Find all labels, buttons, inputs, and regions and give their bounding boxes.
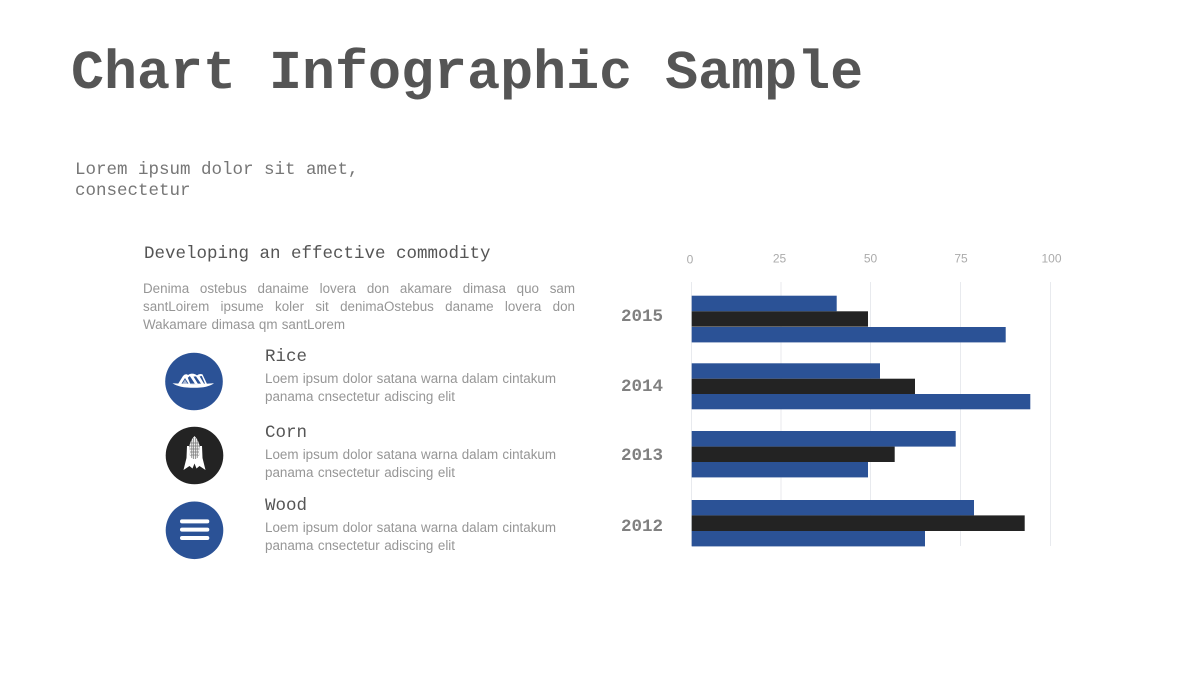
bars: 2015 (692, 296, 1006, 342)
icon: corn (166, 426, 224, 484)
year label 2013: 2013 (621, 446, 663, 466)
bars: 2013 (692, 431, 956, 477)
axis labels: 50 (864, 252, 877, 266)
text: wood description: Loem ipsum dolor satana warna dalam cintakum (265, 520, 556, 535)
intro paragraph (143, 281, 575, 332)
year label 2012: 2012 (621, 517, 663, 537)
text: corn description: Loem ipsum dolor satana warna dalam cintakum (265, 447, 556, 462)
label: corn: Corn (265, 423, 307, 443)
text: rice description: panama cnsectetur adiscing elit (265, 389, 455, 404)
axis labels: 25 (773, 252, 786, 266)
year label 2015: 2015 (621, 307, 663, 327)
icon: wood (166, 502, 224, 560)
text: corn description (265, 447, 556, 480)
axis labels: 0 (687, 252, 694, 266)
text: wood description: panama cnsectetur adiscing elit (265, 538, 455, 553)
axis labels (687, 252, 1062, 266)
intro paragraph: Wakamare dimasa qm santLorem (143, 317, 345, 332)
bar chart (687, 252, 1062, 546)
text: wood description (265, 520, 556, 553)
subtitle: Lorem ipsum dolor sit amet, consectetur (75, 160, 359, 201)
axis labels: 75 (954, 252, 968, 266)
year label 2014: 2014 (621, 377, 663, 397)
text: rice description (265, 371, 556, 404)
intro paragraph: Denima ostebus danaime lovera don akamare dimasa quo sam (143, 281, 575, 296)
intro paragraph: santLoirem ipsume koler sit denimaOstebus daname lovera don (143, 299, 575, 314)
title: Chart Infographic Sample (71, 42, 863, 105)
text: rice description: Loem ipsum dolor satana warna dalam cintakum (265, 371, 556, 386)
icon: rice (165, 352, 223, 410)
bars: 2012 (692, 500, 1025, 546)
label: wood: Wood (265, 496, 307, 516)
heading: developing an effective commodity: Developing an effective commodity (144, 244, 491, 264)
text: corn description: panama cnsectetur adiscing elit (265, 465, 455, 480)
bars: 2014 (692, 363, 1030, 409)
axis labels: 100 (1041, 252, 1062, 266)
label: rice: Rice (265, 347, 307, 367)
